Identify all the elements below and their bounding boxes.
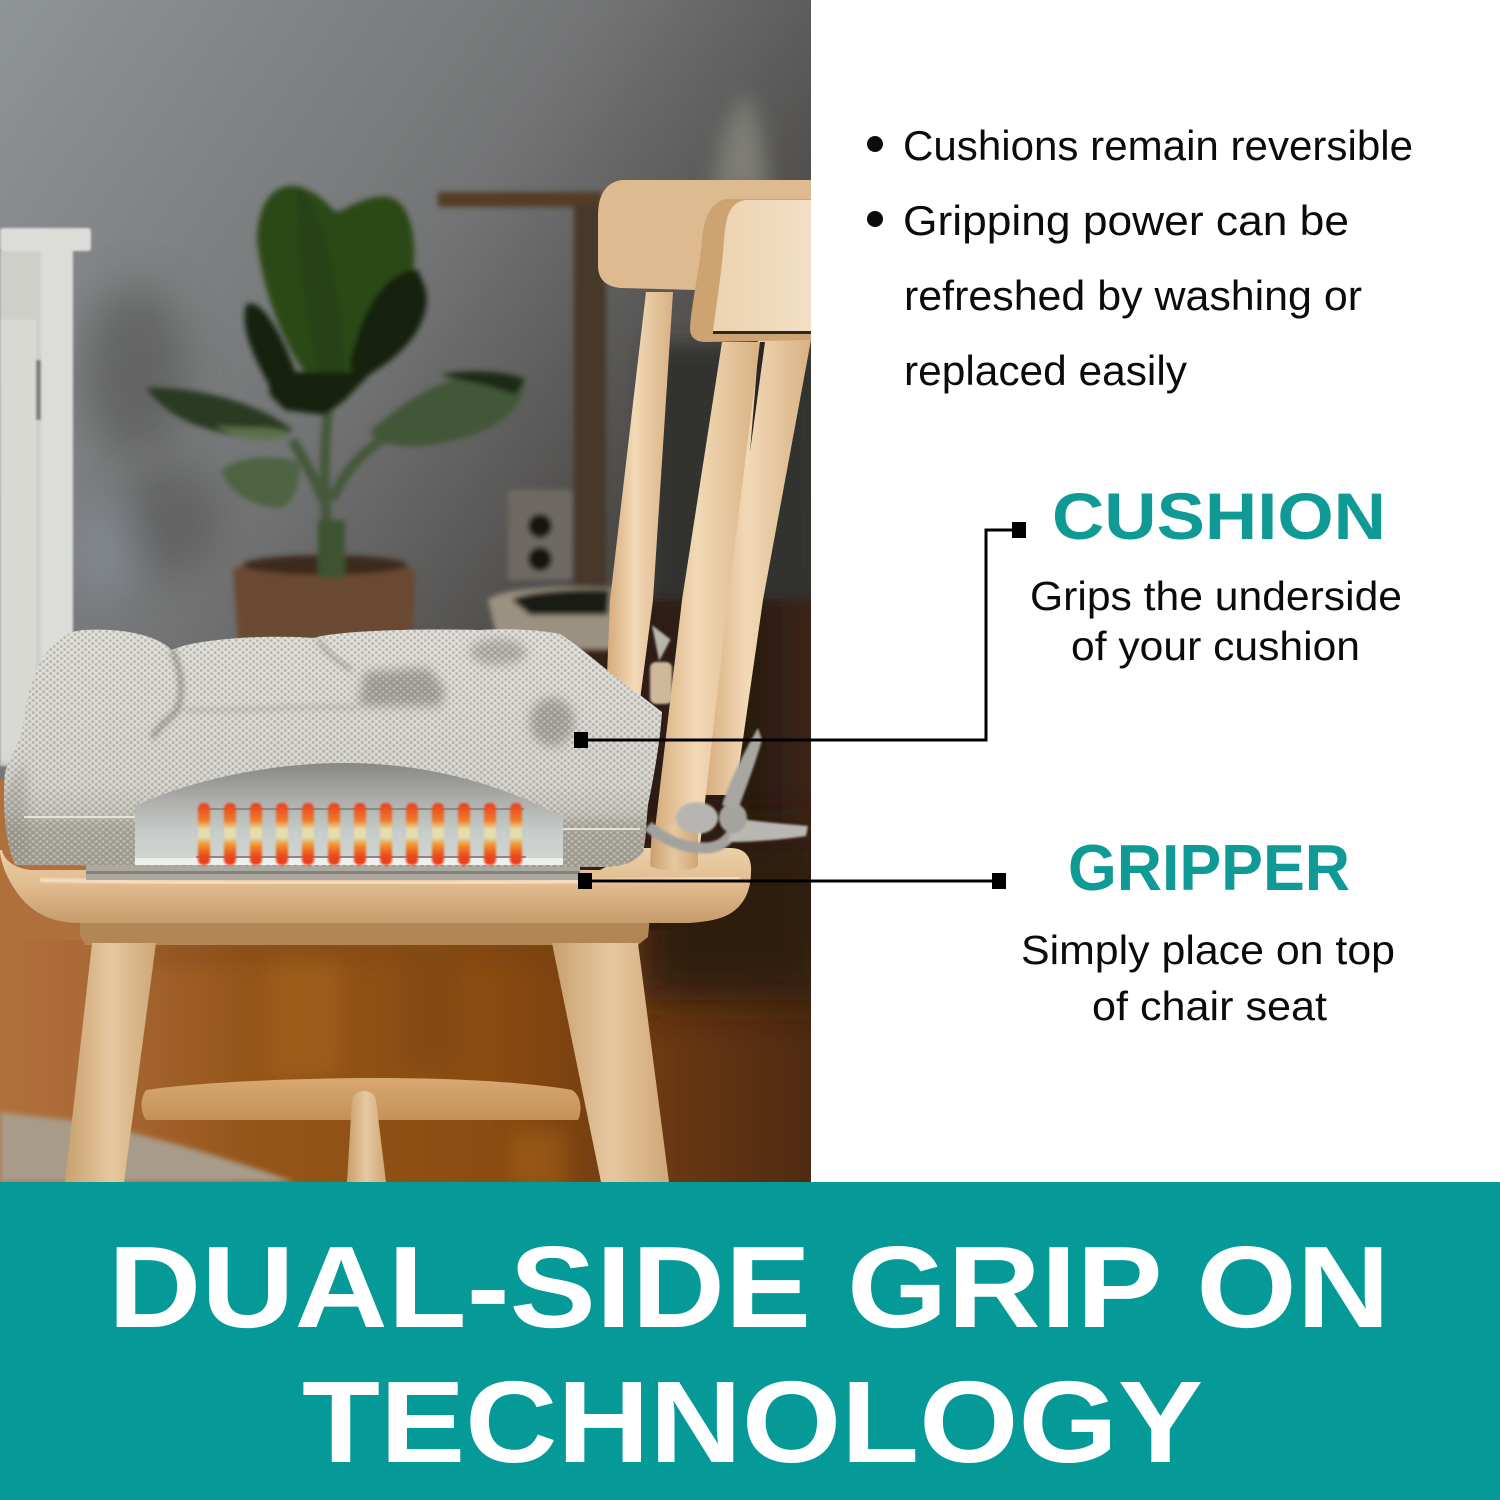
seat highlight line [40,878,740,883]
gripper heading: GRIPPER [1068,831,1350,904]
cushion description [1030,573,1402,669]
chair center stretcher [347,1091,386,1182]
chair apron [80,923,650,945]
chair rear spindle [606,292,673,700]
banner title: DUAL-SIDE GRIP ON [108,1222,1390,1352]
chair left leg [65,943,156,1182]
bullet list: refreshed by washing or [904,272,1362,319]
rug [0,1112,295,1182]
rear tie behind spindles [650,630,672,704]
panel: room photo illustration [0,0,830,1190]
cushion tuft shading [0,620,670,870]
plant pot [233,520,415,640]
gripper description: of chair seat [1092,983,1328,1029]
cushion tie knot [648,728,808,848]
cushion cutaway cross section [135,763,563,865]
distant vase plant [712,90,768,190]
wall shadows [75,285,220,600]
wooden floor [0,780,830,1190]
bullet list: replaced easily [904,347,1187,394]
background wall [0,0,811,820]
white cabinet [0,228,91,766]
bullet list: Gripping power can be [903,197,1349,244]
bottom banner [0,1182,1500,1500]
bullet list: Cushions remain reversible [903,122,1413,169]
callout: gripper leader line [578,873,1006,889]
spindle socket base [650,825,698,870]
bullet list [867,122,1413,394]
gripper description [1021,927,1395,1029]
chair front spindles [650,340,811,872]
chair right leg [552,943,669,1182]
banner title [108,1222,1390,1487]
dark background lower right [580,595,811,930]
dark wall area at right [654,336,811,601]
cushion heading: CUSHION [1052,479,1386,553]
cushion description: Grips the underside [1030,573,1402,619]
plant [144,182,528,522]
chair stretcher [142,1078,580,1120]
chair front rail [690,199,811,342]
banner title: TECHNOLOGY [302,1357,1203,1487]
cushion description: of your cushion [1071,623,1360,669]
side table [438,192,606,605]
chair back rail [598,180,811,293]
callout: cushion leader line [574,522,1026,748]
wall outlet [508,490,572,580]
gripper description: Simply place on top [1021,927,1395,973]
gripper pad [86,865,580,880]
seat cushion [0,620,670,870]
chair seat [0,848,751,923]
panel: white right side [811,0,1500,1182]
heat rods [198,803,522,865]
basket [488,587,640,650]
